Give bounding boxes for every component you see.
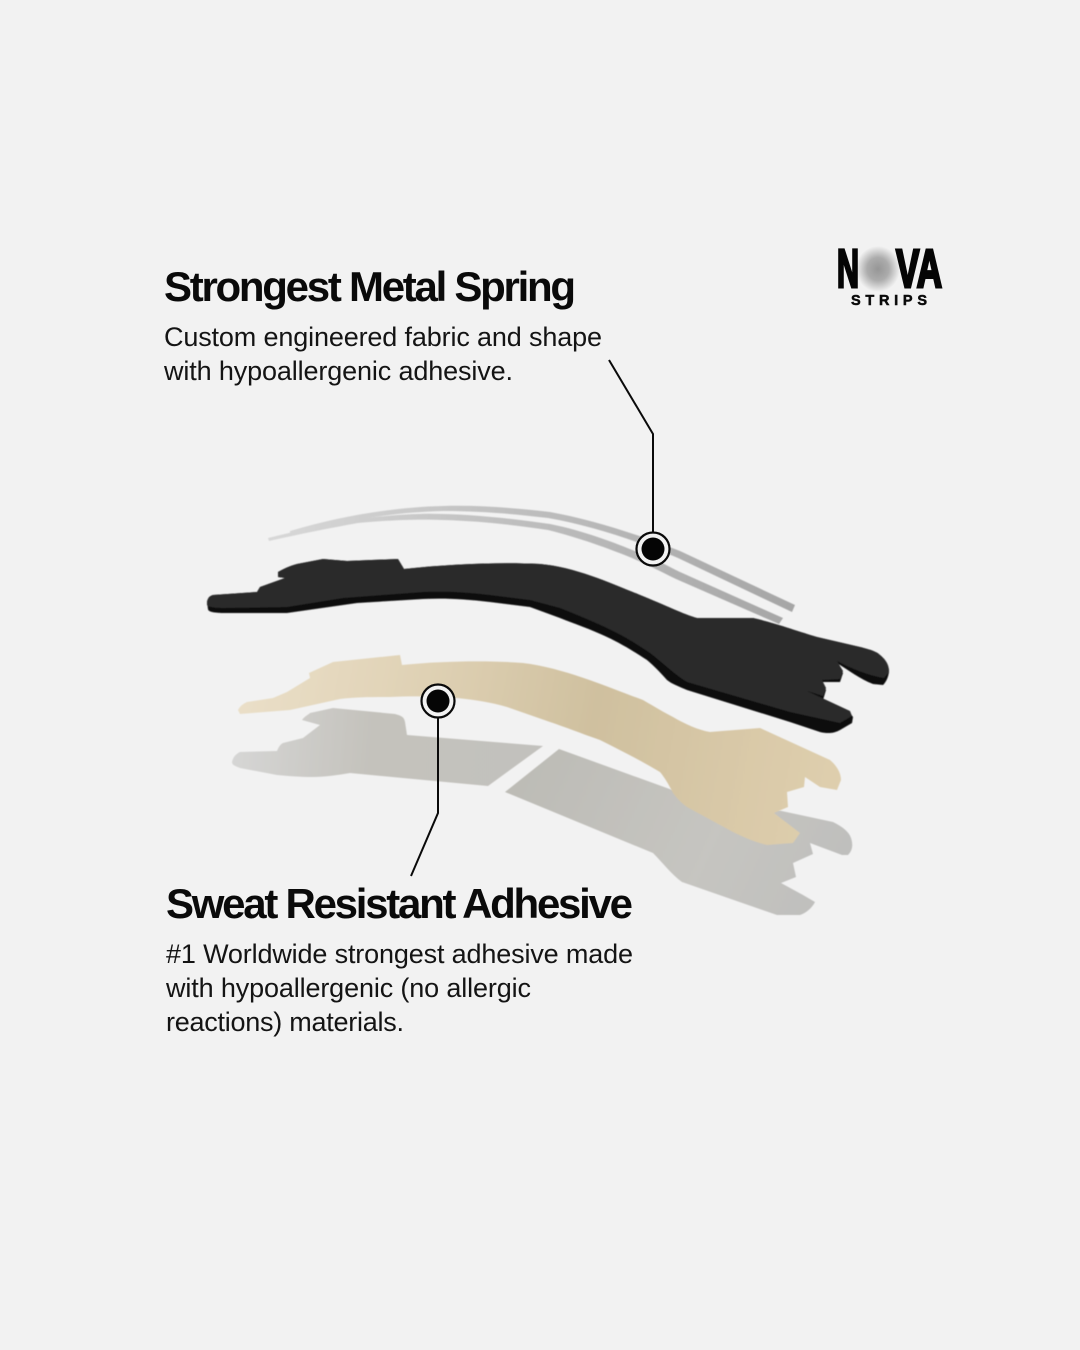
logo: Nova Strips [837, 239, 942, 309]
logo: Nova Strips: VA [896, 239, 942, 299]
text block: spring description [163, 322, 602, 386]
text block: adhesive description: with hypoallergenic (no allergic [165, 973, 531, 1003]
black backing layer [207, 559, 889, 733]
text block: adhesive description: reactions) materials. [166, 1007, 404, 1037]
heading: Strongest Metal Spring: Strongest Metal Spring [164, 263, 576, 310]
heading: Sweat Resistant Adhesive: Sweat Resistant Adhesive [166, 880, 633, 927]
logo: Nova Strips: STRIPS [851, 293, 927, 309]
grey release liner right [505, 749, 852, 915]
text block: adhesive description: #1 Worldwide strongest adhesive made [166, 939, 633, 969]
logo: Nova Strips: N [837, 239, 859, 299]
callout: adhesive connector [411, 684, 454, 876]
metal spring strips [268, 506, 795, 624]
callout: metal spring connector [609, 360, 670, 566]
beige adhesive layer [238, 655, 841, 845]
text block: spring description: Custom engineered fabric and shape [164, 322, 602, 352]
text block: spring description: with hypoallergenic adhesive. [163, 356, 513, 386]
grey release liner left [232, 708, 543, 786]
text block: adhesive description [165, 939, 633, 1037]
